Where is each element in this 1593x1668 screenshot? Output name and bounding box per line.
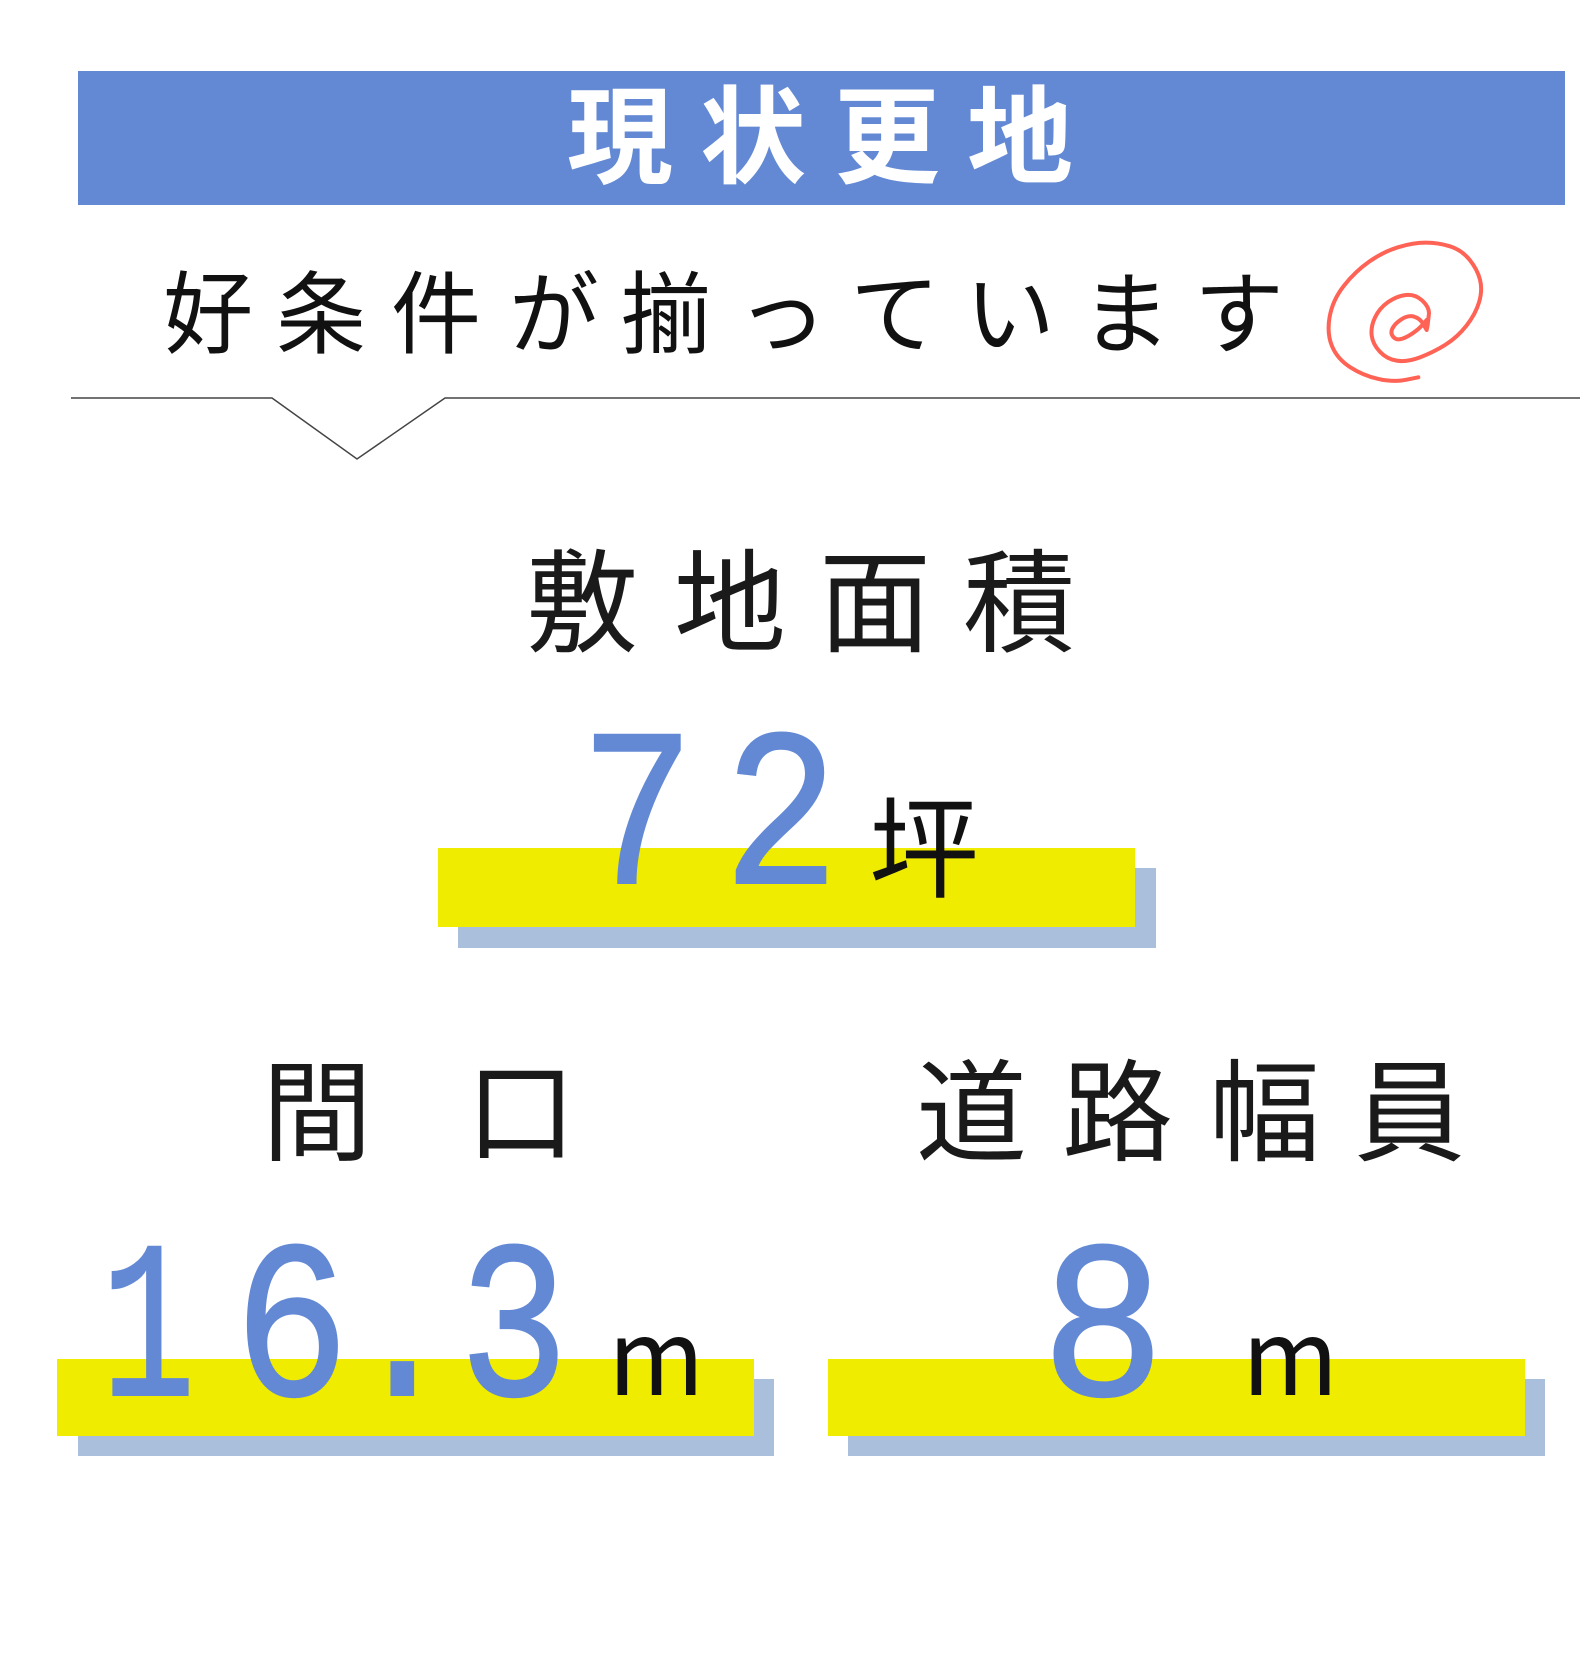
value: 16.3 m [57,1208,774,1464]
value digits: 3 [459,1209,568,1463]
value digits [101,1208,568,1464]
value digits: . [345,1208,460,1463]
label: frontage: 間口 [262,1024,576,1184]
subtitle heading: 好条件が揃っています [163,242,1284,372]
value shadow bar [848,1379,1545,1456]
value unit: 坪 [869,761,979,921]
value highlight bar [828,1359,1525,1436]
label: site area: 敷地面積 [526,514,1075,676]
value digits: 8 [1041,1208,1165,1463]
value highlight bar [57,1359,754,1436]
label: road width: 道路幅員 [916,1023,1465,1184]
title text: 現状更地 [567,52,1073,206]
value highlight bar [438,848,1135,927]
value digits: 6 [234,1208,350,1464]
value digits: 1 [101,1208,196,1463]
value: 8 m [828,1208,1545,1463]
divider line with downward notch [71,398,1580,459]
value shadow bar [458,868,1156,948]
value: 72 tsubo [438,696,1156,952]
value digits: 7 [580,696,695,951]
value digits [580,696,839,952]
value shadow bar [78,1379,774,1456]
title banner [78,52,1565,206]
value unit: m [608,1274,704,1425]
icon: red spiral double circle [1329,243,1481,381]
value digits: 2 [723,696,839,952]
value unit: m [1242,1274,1338,1425]
